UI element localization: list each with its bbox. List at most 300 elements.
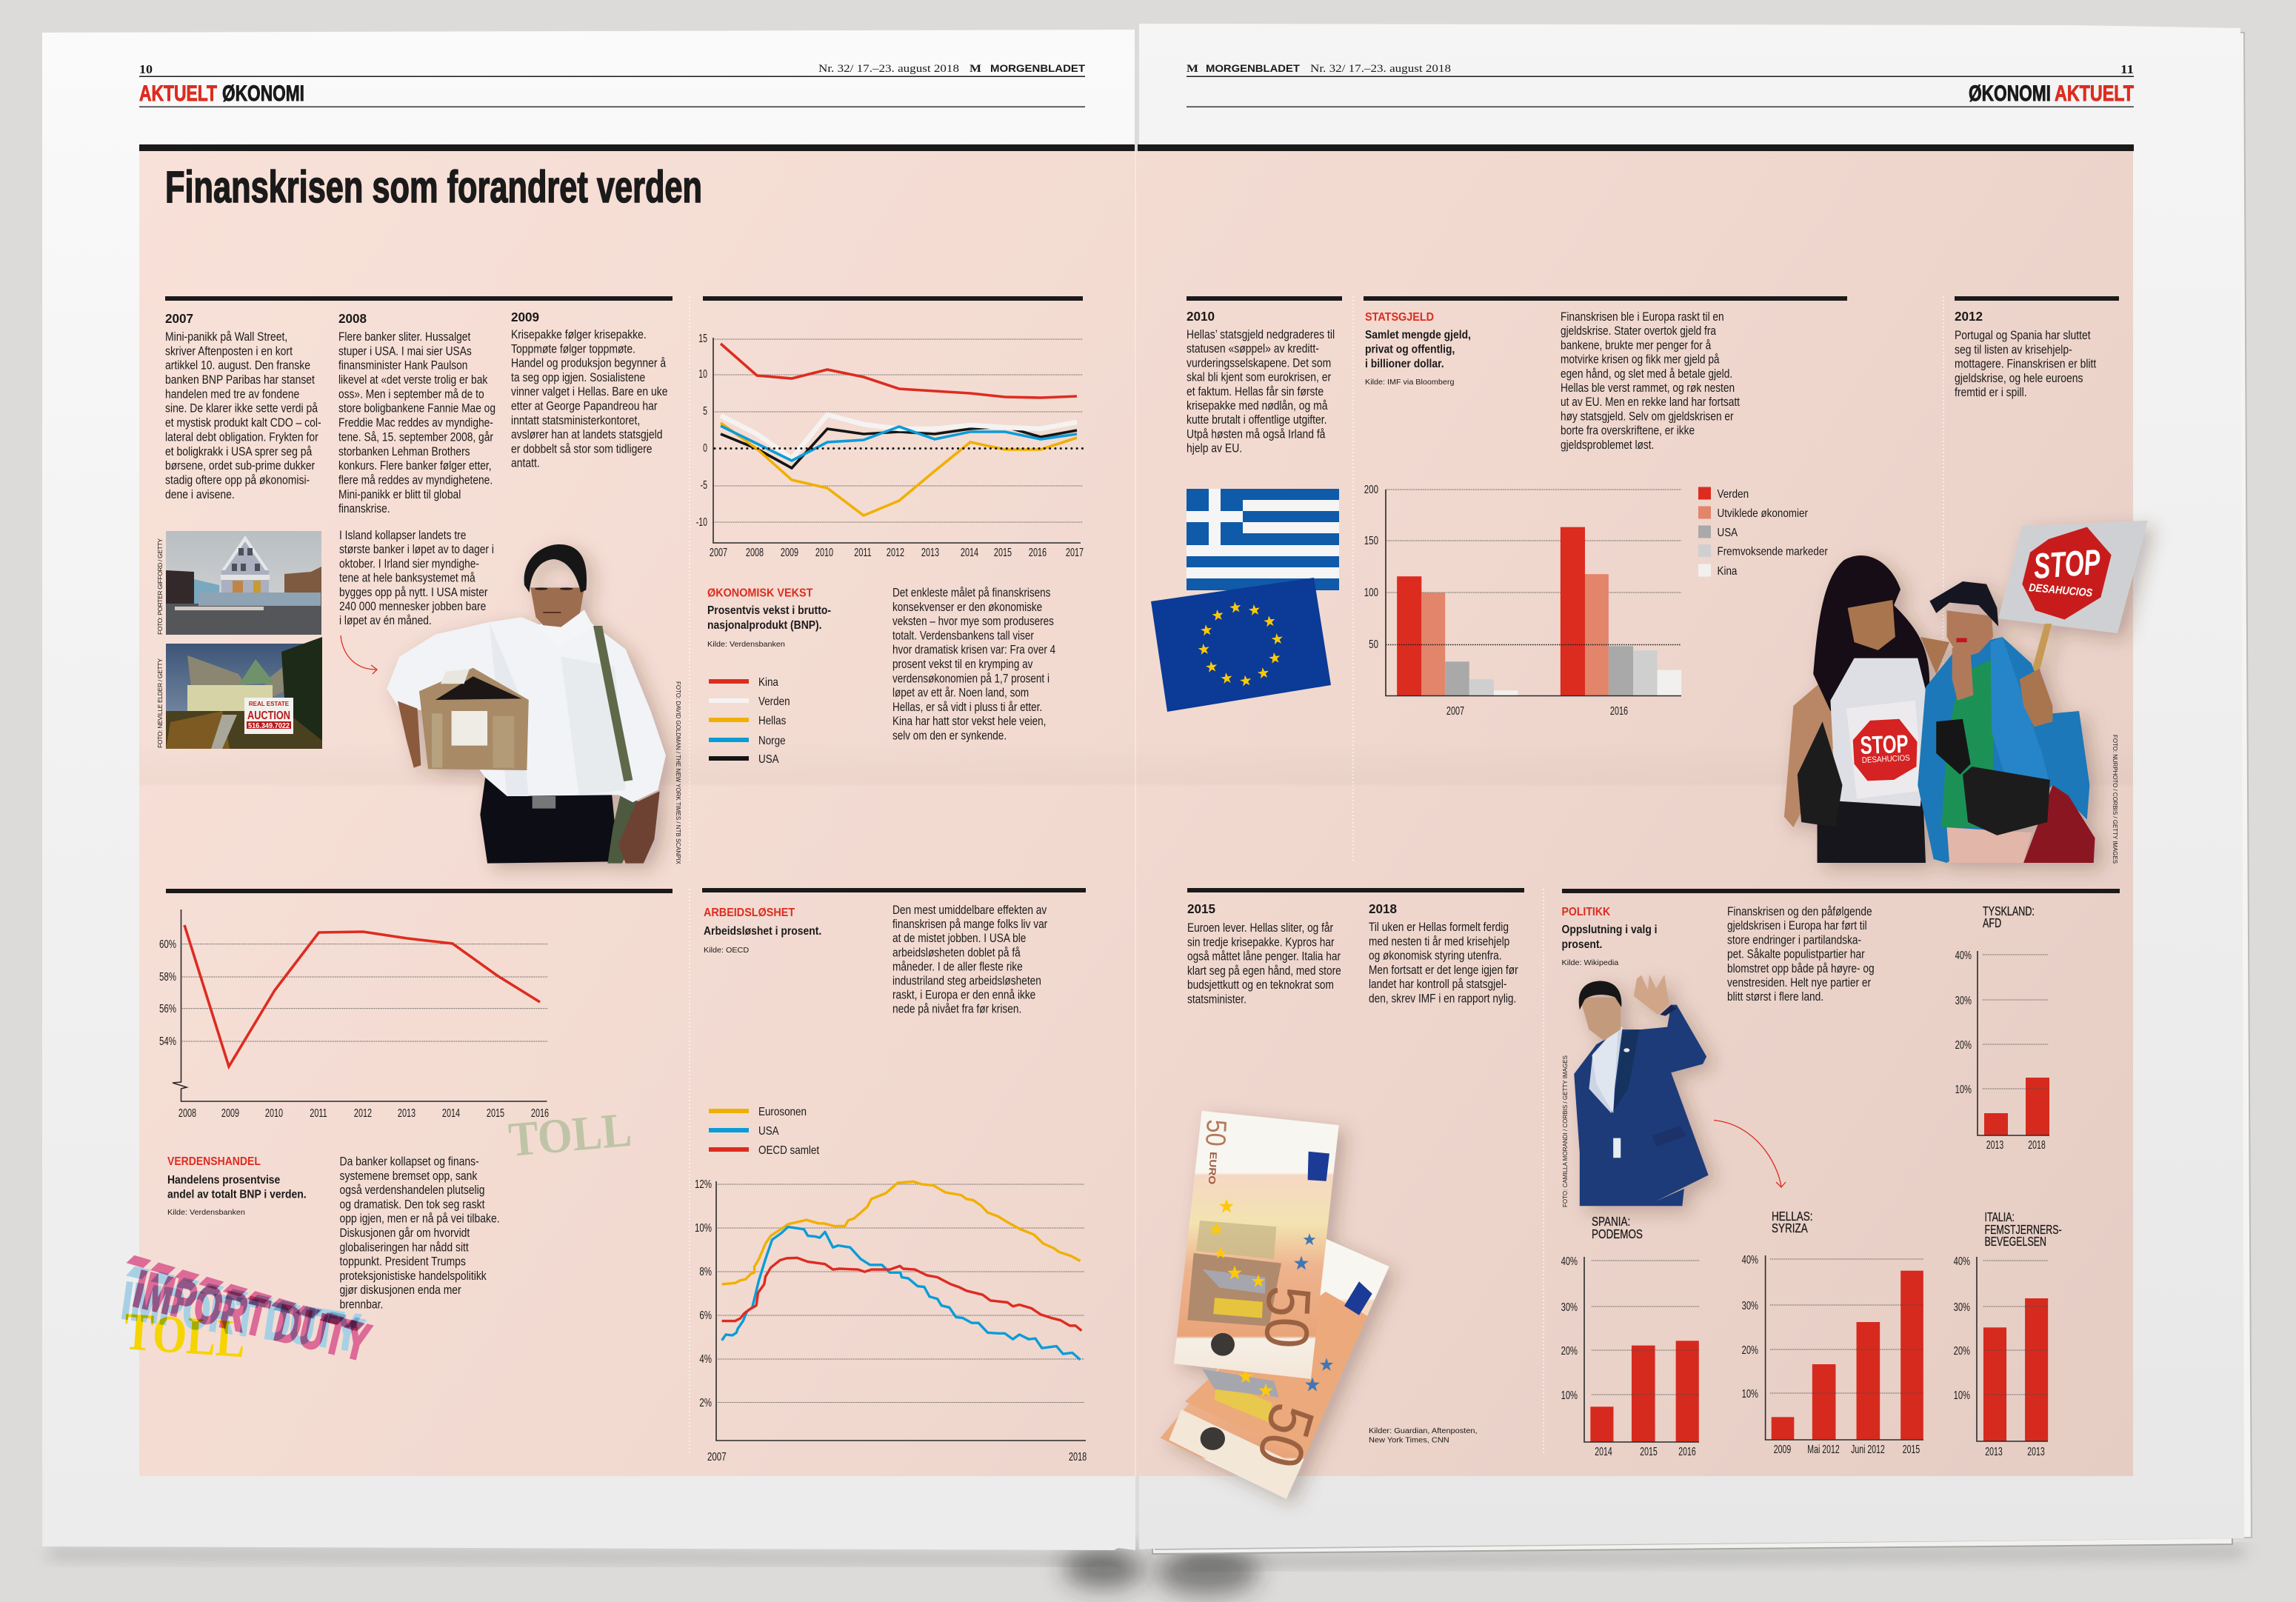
text: economic growth: selv om den er synkende. (892, 729, 1007, 743)
text: 2018: Men fortsatt er det lenge igjen før (1369, 964, 1518, 977)
heading: national debt: privat og offentlig, (1365, 343, 1455, 356)
bar chart: Germany AfD: 10% (1955, 1082, 1972, 1095)
bar chart: Greece Syriza: 30% (1742, 1298, 1758, 1312)
x axis labels: 2008 (746, 546, 764, 559)
text: 2015: sin tredje krisepakke. Kypros har (1187, 935, 1335, 949)
text: 2008: finanskrise. (338, 502, 390, 516)
right page header: ØKONOMI (1969, 81, 2051, 106)
text: world trade: og dramatisk. Den tok seg raskt (339, 1198, 485, 1212)
text: politics: pet. Såkalte populistpartier har (1727, 947, 1865, 961)
series: Kina (721, 344, 1077, 398)
y axis labels: 150 (1364, 533, 1378, 547)
text: 2018 (1369, 901, 1518, 1006)
icon: EU flag (1151, 578, 1331, 712)
bar chart: Spain Podemos: 10% (1561, 1388, 1578, 1401)
y axis labels: 54% (159, 1034, 176, 1047)
text: economic growth: Kina har hatt stor vekst hele veien, (892, 715, 1046, 729)
text: 2015: statsminister. (1187, 992, 1247, 1007)
bar chart: Germany AfD: 2018 (2028, 1138, 2046, 1152)
text: unemployment: industriland steg arbeidsløsheten (892, 974, 1041, 988)
x axis labels: 2012 (354, 1107, 372, 1120)
heading: economic growth: ØKONOMISK VEKST (707, 587, 813, 600)
x axis labels: 2008 (178, 1107, 196, 1120)
text: national debt: Finanskrisen ble i Europa raskt til en (1561, 310, 1724, 324)
text: 2009: inntatt statsministerkontoret, (511, 414, 640, 427)
text: world trade: også verdenshandelen plutselig (339, 1184, 485, 1197)
text: unemployment: nede på nivået fra før krisen. (892, 1003, 1021, 1016)
text: 2018: med nesten ti år med krisehjelp (1369, 935, 1509, 949)
text: 2015 (1187, 901, 1341, 1007)
bar chart: Spain Podemos: 2014 (1595, 1445, 1612, 1458)
pink background panel (139, 151, 2133, 1476)
photo: foreclosed house (166, 531, 321, 635)
y axis labels: 15 (698, 332, 707, 345)
y axis labels: 5 (703, 404, 707, 418)
bar chart: Spain Podemos: 40% (1561, 1254, 1578, 1267)
text: 2007: skriver Aftenposten i en kort (165, 344, 293, 358)
text: politics: store endringer i partilandska- (1727, 933, 1861, 947)
text: economic growth: hvor dramatisk krisen var: Fra over 4 (892, 643, 1055, 657)
text: national debt: høy statsgjeld. Selv om gjeldskrisen er (1561, 410, 1734, 424)
heading: unemployment: Kilde: OECD (704, 947, 749, 955)
bar chart: Spain Podemos (1561, 1215, 1699, 1458)
text: 2009: antatt. (511, 457, 540, 470)
text: 2008: stuper i USA. I mai sier USAs (338, 344, 472, 358)
series: Norge (721, 426, 1077, 461)
text: 2007: banken BNP Paribas har stanset (165, 373, 316, 387)
series: Verden (721, 415, 1077, 458)
top black bar (139, 144, 2134, 151)
series: USA (721, 427, 1077, 468)
arrow (1714, 1120, 1786, 1187)
text: world trade: opp igjen, men er nå på vei tilbake. (339, 1212, 500, 1226)
bar chart: Italy Five Star Movement: 30% (1954, 1300, 1970, 1313)
text: economic growth: Det enkleste målet på finanskrisens (892, 586, 1050, 600)
left page header: MORGENBLADET (990, 62, 1085, 74)
text: unemployment: at de mistet jobben. I USA ble (892, 932, 1026, 946)
heading: politics: Oppslutning i valg i (1561, 923, 1658, 936)
text: 2009: ta seg opp igjen. Sosialistene (511, 371, 645, 384)
bar chart: Greece Syriza: 40% (1742, 1252, 1758, 1266)
heading: world trade (167, 1155, 307, 1217)
protest sign plate (1998, 521, 2148, 633)
y axis labels (159, 937, 176, 1047)
bar chart: Germany AfD: 20% (1955, 1038, 1972, 1051)
photo: auction house: AUCTION (247, 710, 290, 722)
heading: unemployment: Arbeidsløshet i prosent. (704, 924, 821, 938)
x axis labels: 2011 (310, 1107, 327, 1120)
text: 2008: Mini-panikk er blitt til global (338, 488, 461, 501)
x axis labels: 2014 (961, 546, 978, 559)
x axis labels: 2007 (707, 1449, 727, 1463)
text: 2008: tene. Så, 15. september 2008, går (338, 430, 493, 444)
text: 2010: 2010 (1187, 309, 1215, 324)
back note stars and denomination (1238, 1358, 1333, 1475)
bar chart: Greece Syriza: 10% (1742, 1386, 1758, 1400)
front note (1174, 1111, 1339, 1379)
bar chart: Spain Podemos: 2016 (1678, 1445, 1696, 1458)
text: economic growth: løpet av ett år. Noen land, som (892, 686, 1029, 700)
bar chart: Spain Podemos: 30% (1561, 1300, 1578, 1313)
y axis labels: -10 (696, 515, 707, 529)
x axis labels: 2012 (887, 546, 904, 559)
photo credits: houses: FOTO: NEVILLE ELDER / GETTY (156, 658, 164, 748)
y axis labels (695, 1177, 712, 1409)
left page (42, 30, 1135, 1550)
left page header (139, 62, 1085, 107)
y axis labels: 12% (695, 1177, 712, 1190)
y axis labels: 60% (159, 937, 176, 950)
text: 2010: kutte brutalt i offentlige utgifter. (1187, 413, 1327, 427)
text: 2015: budsjettkutt og en teknokrat som (1187, 978, 1334, 992)
text: Island: største banker i løpet av to dager i (339, 543, 494, 557)
photo: auction house (166, 637, 322, 749)
text: 2012 (1955, 309, 2097, 400)
legend: unemployment (709, 1106, 819, 1157)
text: 2012: mottagere. Finanskrisen er blitt (1955, 358, 2097, 371)
x axis labels: 2011 (854, 546, 872, 559)
text: 2009: Toppmøte følger toppmøte. (511, 342, 635, 356)
text: 2009: vinner valget i Hellas. Bare en uke (511, 385, 667, 399)
front note stars and denomination: EURO (1207, 1152, 1219, 1185)
text: 2015: Euroen lever. Hellas sliter, og får (1187, 921, 1333, 935)
text: 2009: 2009 (511, 310, 539, 324)
text: 2018: landet har kontroll på statsgjel- (1369, 978, 1506, 992)
right page header: M (1187, 63, 1198, 75)
text: world trade: gjør diskusjonen enda mer (339, 1284, 461, 1298)
text: Island: oktober. I Irland sier myndighe- (339, 557, 479, 571)
bar chart: Germany AfD (1955, 904, 2049, 1152)
heading: world trade: Handelens prosentvise (167, 1173, 280, 1187)
bar chart: Italy Five Star Movement: 2013 (2027, 1445, 2045, 1458)
text: 2012: fremtid er i spill. (1955, 386, 2027, 400)
text: 2007: 2007 (165, 311, 193, 326)
legend: unemployment: OECD samlet (758, 1144, 819, 1157)
heading: politics: Kilde: Wikipedia (1561, 959, 1618, 967)
text: 2007: et mystisk produkt kalt CDO – col- (165, 416, 321, 430)
text: 2012: gjeldskrise, og hele euroens (1955, 372, 2083, 385)
text: 2008 (338, 311, 495, 516)
paper shadows (49, 1546, 2244, 1595)
back note (1161, 1239, 1389, 1499)
text: Island: tene at hele banksystemet må (339, 571, 475, 585)
text: 2018: den, skrev IMF i en rapport nylig. (1369, 992, 1516, 1006)
y axis labels: -5 (701, 478, 707, 492)
y axis labels: 50 (1369, 637, 1378, 650)
text: 2010: vurderingsselskapene. Det som (1187, 356, 1331, 370)
text: world trade: brennbar. (339, 1298, 383, 1312)
text: 2008: Freddie Mac reddes av myndighe- (338, 416, 493, 430)
x axis labels (707, 1449, 1087, 1464)
bar chart: Spain Podemos: 2015 (1640, 1445, 1658, 1458)
heading: economic growth: Kilde: Verdensbanken (707, 641, 785, 649)
text: 2007: sine. De klarer ikke sette verdi på (165, 402, 318, 415)
text: national debt: bankene, brukte mer penger for å (1561, 338, 1712, 353)
legend: national debt (1698, 487, 1828, 578)
text: world trade: proteksjonistiske handelspolitikk (339, 1269, 487, 1283)
photo: protesters with stop signs (1784, 521, 2148, 863)
x axis labels: 2016 (1610, 704, 1628, 718)
photo credits: houses: FOTO: PORTER GIFFORD / GETTY (156, 538, 164, 635)
text: unemployment: måneder. I de aller fleste rike (892, 960, 1023, 974)
text: 2007: artikkel 10. august. Den franske (165, 359, 310, 373)
text: 2010: hjelp av EU. (1187, 442, 1242, 455)
icon: Greek flag (1187, 489, 1339, 590)
sign text: small: STOP (1860, 730, 1909, 760)
heading: world trade: VERDENSHANDEL (167, 1155, 261, 1168)
left page header: Nr. 32/ 17.–23. august 2018 (818, 63, 959, 75)
right page header (1187, 62, 2134, 107)
front note stars and denomination (1199, 1119, 1324, 1350)
text: national debt: borte fra overskriftene, er ikke (1561, 424, 1695, 438)
text: 2018: Til uken er Hellas formelt ferdig (1369, 921, 1509, 934)
text: 2007: dene i avisene. (165, 488, 235, 501)
text: world trade: globaliseringen har nådd sitt (339, 1241, 469, 1255)
text: politics: gjeldskrisen i Europa har ført til (1727, 919, 1867, 933)
text: 2010: krisepakke med nødlån, og må (1187, 399, 1328, 413)
bar chart: Italy Five Star Movement (1954, 1210, 2062, 1458)
euro notes (1161, 1111, 1389, 1499)
x axis labels: 2013 (921, 546, 939, 559)
text: unemployment: arbeidsløsheten doblet på få (892, 946, 1021, 960)
legend: economic growth: Norge (758, 735, 786, 747)
heading: economic growth: Prosentvis vekst i brutto- (707, 604, 831, 617)
text: national debt: gjeldskrise. Stater overtok gjeld fra (1561, 324, 1717, 338)
legend: economic growth: Hellas (758, 715, 786, 727)
photo: auction house: REAL ESTATE (249, 701, 290, 707)
legend: national debt: Fremvoksende markeder (1717, 546, 1828, 558)
front note stars and denomination: 50 (1199, 1119, 1232, 1147)
x axis labels: 2015 (487, 1107, 504, 1120)
text: 2008: oss». Men i september må de to (338, 387, 484, 401)
text: 2007: et boligkrakk i USA sprer seg på (165, 445, 313, 458)
bar chart: Germany AfD: AFD (1983, 916, 2001, 931)
x axis labels: 2010 (265, 1107, 283, 1120)
left page header: 10 (139, 62, 153, 76)
section rules (165, 296, 2120, 893)
photo: auction house: 516.349.7022 (248, 722, 290, 730)
bar chart: Spain Podemos: SPANIA: (1592, 1215, 1630, 1229)
text: 2012: Portugal og Spania har sluttet (1955, 329, 2091, 342)
heading: economic growth: nasjonalprodukt (BNP). (707, 618, 822, 632)
photo credit: politician: FOTO: CAMILLA MORANDI / CORBIS / GETTY IMAGES (1561, 1055, 1569, 1207)
y axis labels: 2% (699, 1395, 712, 1409)
text: 2010: skal bli kjent som eurokrisen, er (1187, 371, 1331, 384)
front note stars and denomination: 50 (1252, 1284, 1324, 1350)
series: USA (722, 1227, 1081, 1360)
heading: national debt: STATSGJELD (1365, 310, 1434, 324)
heading: world trade: andel av totalt BNP i verden. (167, 1188, 307, 1201)
bar chart: Greece Syriza: 2015 (1903, 1443, 1920, 1456)
legend: economic growth: Verden (758, 695, 790, 708)
legend: national debt: Verden (1717, 488, 1749, 501)
x axis labels: 2013 (398, 1107, 416, 1120)
text: 2010: Utpå høsten må også Irland få (1187, 427, 1326, 441)
x axis labels: 2007 (710, 546, 727, 559)
bar chart: Germany AfD: 30% (1955, 993, 1972, 1007)
title: Finanskrisen som forandret verden (165, 162, 702, 212)
text: world trade: systemene bremset opp, sank (339, 1169, 478, 1183)
text: 2008: storbanken Lehman Brothers (338, 445, 470, 458)
text: 2008: likevel at «det verste trolig er bak (338, 373, 488, 387)
decoration: IMPORT DUTY stamp (119, 1259, 376, 1372)
decoration: IMPORT DUTY stamp: IMPORT DUTY (119, 1272, 363, 1362)
bar chart: Greece Syriza: 2009 (1774, 1443, 1791, 1456)
text: 2009: avslører han at landets statsgjeld (511, 428, 662, 441)
sign text: small (1860, 730, 1910, 765)
y axis labels: 58% (159, 969, 176, 983)
stacked lower sheets (1152, 30, 2252, 1554)
text: 2010: Hellas’ statsgjeld nedgraderes til (1187, 328, 1335, 341)
text: world trade: Diskusjonen går om hvorvidt (339, 1226, 470, 1240)
text: economic growth: Hellas, er så vidt i pluss ti år etter. (892, 701, 1042, 714)
bar chart: Germany AfD: 40% (1955, 948, 1972, 961)
text: unemployment: finanskrisen på mange folks liv var (892, 918, 1047, 931)
text: national debt: egen hånd, og slet med å betale gjeld. (1561, 367, 1732, 381)
right page header: 11 (2120, 62, 2134, 76)
y axis labels: 56% (159, 1001, 176, 1015)
bar chart: Spain Podemos: PODEMOS (1592, 1227, 1643, 1242)
heading: world trade: Kilde: Verdensbanken (167, 1209, 245, 1217)
photo: man with cardboard box (387, 544, 666, 864)
y axis labels (1364, 482, 1378, 650)
decoration: IMPORT DUTY stamp: TOLL (122, 1301, 247, 1369)
bar chart: Spain Podemos: 20% (1561, 1344, 1578, 1357)
bar chart: Greece Syriza: Juni 2012 (1851, 1443, 1885, 1456)
heading: unemployment: ARBEIDSLØSHET (704, 906, 795, 919)
y axis labels: 10 (698, 367, 707, 381)
right page header: MORGENBLADET (1206, 62, 1300, 74)
heading: unemployment (704, 906, 821, 955)
text: 2008: store boligbankene Fannie Mae og (338, 402, 495, 415)
legend: national debt: USA (1717, 527, 1738, 539)
text: 2012: 2012 (1955, 309, 1983, 324)
x axis labels: 2018 (1069, 1450, 1087, 1464)
x axis labels: 2009 (221, 1107, 239, 1120)
x axis labels (178, 1107, 549, 1120)
text: politics: blitt størst i flere land. (1727, 990, 1823, 1004)
text: national debt: Hellas ble verst rammet, og røk nesten (1561, 381, 1735, 395)
bar chart: Italy Five Star Movement: 2013 (1985, 1445, 2003, 1458)
y axis labels: 200 (1364, 482, 1378, 495)
bars: 2007 (1397, 576, 1518, 695)
neck sign (1846, 701, 1923, 799)
x axis labels: 2007 (1446, 704, 1464, 718)
text: Island: i løpet av én måned. (339, 614, 432, 628)
text: 2008: finansminister Hank Paulson (338, 359, 467, 373)
bar chart: Greece Syriza: 20% (1742, 1343, 1758, 1356)
sign text: large: DESAHUCIOS (2029, 581, 2093, 599)
legend: economic growth: Kina (758, 676, 779, 689)
x axis labels: 2016 (531, 1107, 549, 1120)
x axis labels (710, 546, 1084, 559)
heading: national debt: Kilde: IMF via Bloomberg (1365, 378, 1455, 387)
legend: national debt: Kina (1717, 565, 1738, 578)
arrow (341, 635, 377, 674)
photo credits: houses (156, 538, 164, 748)
text: national debt: gjeldsproblemet løst. (1561, 438, 1654, 452)
heading: economic growth (707, 587, 831, 649)
heading: politics (1561, 905, 1658, 967)
bar chart: Germany AfD: TYSKLAND: (1983, 904, 2035, 919)
y axis labels: 100 (1364, 585, 1378, 598)
left page header: AKTUELT (139, 81, 217, 106)
text: 2009: er dobbelt så stor som tidligere (511, 442, 653, 456)
text: world trade: toppunkt. President Trumps (339, 1255, 466, 1269)
text: 2007: Mini-panikk på Wall Street, (165, 330, 287, 344)
source note: New York Times, CNN (1369, 1436, 1449, 1444)
text: 2018: 2018 (1369, 901, 1397, 916)
text: 2018: og økonomisk styring utenfra. (1369, 949, 1502, 963)
y axis labels: 4% (699, 1352, 712, 1365)
text: economic growth: prosent vekst til en krymping av (892, 658, 1033, 671)
x axis labels: 2017 (1066, 546, 1084, 559)
heading: national debt (1365, 310, 1471, 387)
heading: politics: prosent. (1561, 938, 1602, 951)
series: OECD samlet (722, 1258, 1081, 1331)
legend: unemployment: USA (758, 1125, 779, 1138)
text: 2010 (1187, 309, 1335, 455)
bars: 2016 (1561, 527, 1681, 695)
text: 2009: Handel og produksjon begynner å (511, 357, 667, 370)
text: 2009 (511, 310, 667, 470)
decoration: TOLL stamp olive: TOLL (507, 1103, 634, 1167)
y axis labels: 0 (703, 441, 707, 455)
heading: politics: POLITIKK (1561, 905, 1610, 918)
left page header: ØKONOMI (222, 81, 304, 106)
series: Eurosonen (722, 1181, 1081, 1284)
bar chart: Greece Syriza: HELLAS: (1772, 1209, 1812, 1224)
text: unemployment: raskt, i Europa er den ennå ikke (892, 988, 1035, 1002)
text: Island: 240 000 mennesker jobben bare (339, 600, 486, 613)
text: 2009: Krisepakke følger krisepakke. (511, 328, 647, 341)
sign text: large (2029, 543, 2102, 599)
y axis labels: 6% (699, 1308, 712, 1321)
bar chart: Italy Five Star Movement: 20% (1954, 1344, 1970, 1357)
text: Island: I Island kollapser landets tre (339, 529, 466, 542)
legend: national debt: Utviklede økonomier (1717, 507, 1808, 520)
bar chart: Greece Syriza: SYRIZA (1772, 1221, 1808, 1236)
text: 2009: etter at George Papandreou har (511, 399, 658, 413)
right page header: Nr. 32/ 17.–23. august 2018 (1310, 63, 1451, 75)
sign text: small: DESAHUCIOS (1862, 754, 1910, 765)
y axis labels: 10% (695, 1221, 712, 1234)
text: 2008: konkurs. Flere banker følger etter, (338, 459, 492, 473)
text: economic growth: konsekvenser er den økonomiske (892, 601, 1042, 614)
text: 2015: klart seg på egen hånd, med store (1187, 964, 1341, 978)
decoration: IMPORT DUTY stamp: IMPORT DUTY (128, 1260, 376, 1372)
bar chart: Italy Five Star Movement: BEVEGELSEN (1985, 1235, 2046, 1249)
bar chart: Italy Five Star Movement: FEMSTJERNERS- (1985, 1223, 2062, 1238)
text: unemployment: Den mest umiddelbare effekten av (892, 904, 1047, 917)
text: 2010: et faktum. Hellas får sin første (1187, 385, 1324, 398)
text: national debt: motvirke krisen og fikk mer gjeld på (1561, 353, 1720, 367)
heading: national debt: i billioner dollar. (1365, 357, 1444, 370)
heading: national debt: Samlet mengde gjeld, (1365, 328, 1471, 341)
text: national debt: ut av EU. Men en rekke land har fortsatt (1561, 396, 1741, 410)
text: 2015: også måttet låne penger. Italia har (1187, 949, 1341, 964)
y axis labels: 8% (699, 1264, 712, 1278)
photo credit: protesters: FOTO: NURPHOTO / CORBIS / GETTY IMAGES (2112, 735, 2119, 864)
line chart: economic growth (696, 332, 1084, 559)
bar chart: Italy Five Star Movement: 40% (1954, 1254, 1970, 1267)
x axis labels: 2009 (781, 546, 798, 559)
x axis labels: 2016 (1029, 546, 1047, 559)
left page header: M (970, 63, 981, 75)
text: 2007 (165, 311, 321, 501)
legend: economic growth (709, 676, 790, 766)
bar chart: Greece Syriza (1742, 1209, 1923, 1456)
